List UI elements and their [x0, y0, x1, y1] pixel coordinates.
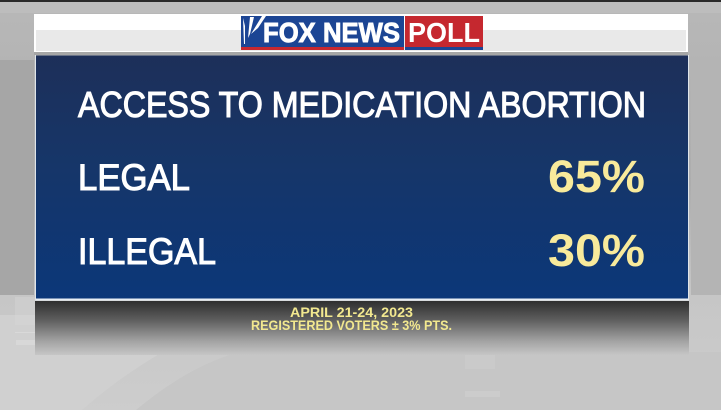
footnote: date and sample: REGISTERED VOTERS ± 3% PTS.	[251, 317, 452, 333]
logo: red Poll block	[405, 16, 483, 47]
value: 30%: 30%	[548, 225, 645, 276]
heading: ACCESS TO MEDICATION ABORTION	[78, 84, 646, 125]
logo: Fox News Poll	[241, 16, 483, 50]
panel: poll results	[35, 55, 689, 300]
value: 65%: 65%	[548, 151, 645, 202]
footer shadow band	[35, 301, 689, 355]
header band	[34, 14, 688, 55]
icon: searchlight beams	[243, 16, 266, 44]
row label: Illegal: ILLEGAL	[78, 231, 216, 272]
footnote: date and sample: APRIL 21-24, 2023	[290, 304, 413, 320]
logo: blue Fox News block	[241, 16, 404, 47]
logo text: Poll: POLL	[408, 17, 480, 48]
footnote: date and sample	[251, 304, 452, 333]
row label: Legal: LEGAL	[78, 157, 190, 198]
logo text: Fox News: FOX NEWS	[263, 17, 400, 48]
